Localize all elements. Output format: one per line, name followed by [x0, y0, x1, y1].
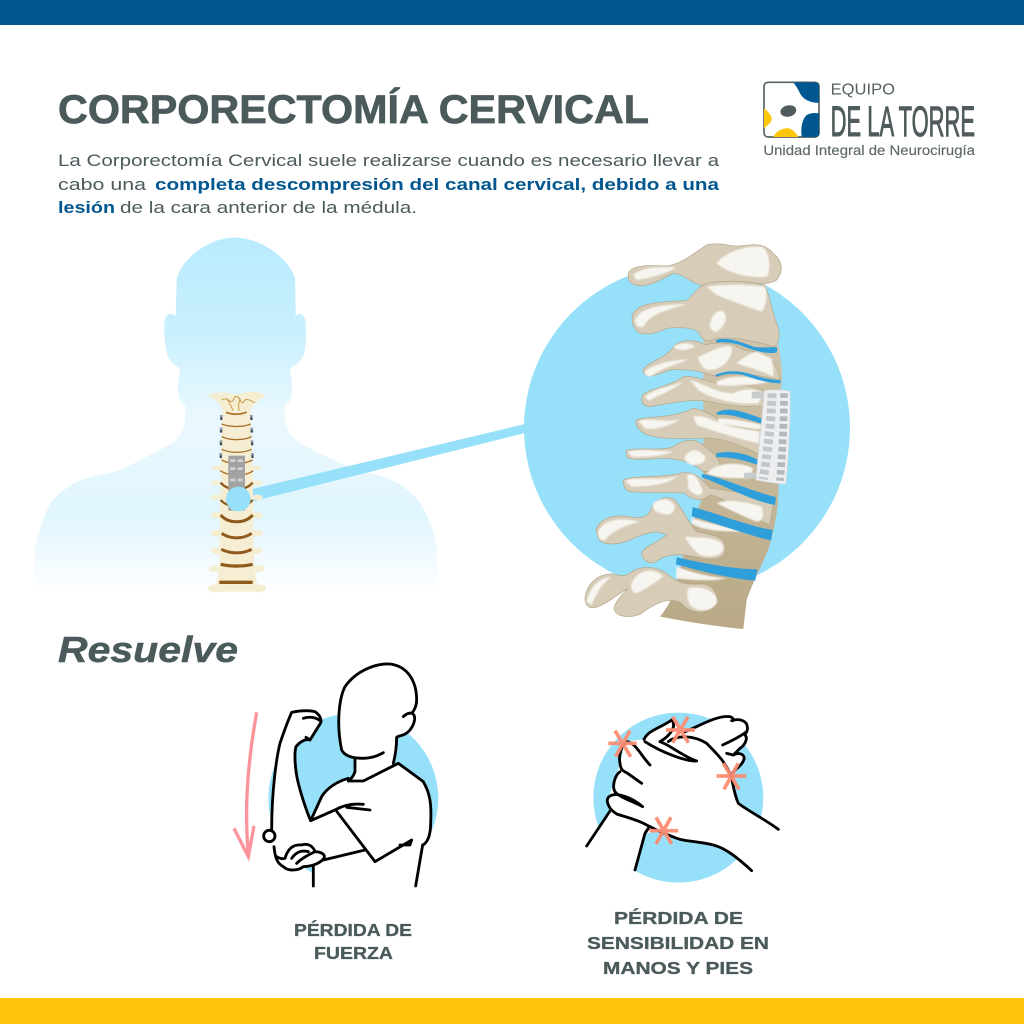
- label: sensitivity: SENSIBILIDAD EN: [587, 933, 769, 953]
- hands: [587, 717, 778, 871]
- hands fill: [587, 717, 778, 871]
- hand: [274, 844, 324, 870]
- intro text: de la cara anterior de la médula.: [120, 198, 417, 217]
- intro text: completa descompresión del canal cervical, debido a una: [155, 175, 720, 194]
- bone highlights: [587, 247, 773, 610]
- label: sensitivity: PÉRDIDA DE: [614, 907, 743, 928]
- logo: [763, 81, 975, 158]
- shirt lines: [311, 758, 431, 886]
- wrists: [587, 810, 648, 870]
- connector line: [240, 424, 525, 503]
- processes: [585, 244, 781, 617]
- intro text: La Corporectomía Cervical suele realizarse cuando es necesario llevar a: [58, 151, 720, 170]
- icon background circle: [268, 713, 438, 883]
- intro text: [58, 151, 720, 217]
- arrow: [234, 712, 257, 857]
- large blue circle: [524, 265, 850, 591]
- label: strength: FUERZA: [314, 943, 393, 963]
- vertebral column: [660, 339, 782, 629]
- arm lines: [272, 711, 321, 830]
- label: sensitivity: MANOS Y PIES: [603, 958, 753, 978]
- label: strength: PÉRDIDA DE: [294, 919, 412, 940]
- logo: EQUIPO: [831, 81, 895, 98]
- front hand fingers: [607, 742, 752, 871]
- body silhouette: [33, 238, 438, 596]
- label: strength: [294, 919, 412, 963]
- arm fill: [272, 711, 365, 867]
- logo: Unidad Integral de Neurocirugía: [763, 143, 975, 158]
- pain marks: [608, 717, 746, 844]
- intro text: cabo una: [58, 175, 147, 194]
- section heading: Resuelve: [58, 629, 238, 670]
- icon: loss of sensitivity: [587, 713, 778, 883]
- elbow: [264, 830, 275, 842]
- figure: [264, 664, 431, 886]
- intervertebral discs: [676, 339, 781, 581]
- small spine: [207, 392, 266, 592]
- icon background circle: [593, 713, 763, 883]
- intro text: lesión: [58, 198, 115, 217]
- rear hand outline: [644, 720, 674, 742]
- head: [339, 664, 417, 763]
- neck fill: [348, 737, 398, 781]
- torso fill: [311, 763, 431, 886]
- label: sensitivity: [587, 907, 769, 978]
- cervical spine illustration: [585, 244, 790, 629]
- title: CORPORECTOMÍA CERVICAL: [58, 87, 649, 132]
- implant cage: [756, 390, 790, 484]
- top bar: [0, 0, 1024, 25]
- icon: loss of strength: [234, 664, 438, 886]
- bottom bar: [0, 998, 1024, 1024]
